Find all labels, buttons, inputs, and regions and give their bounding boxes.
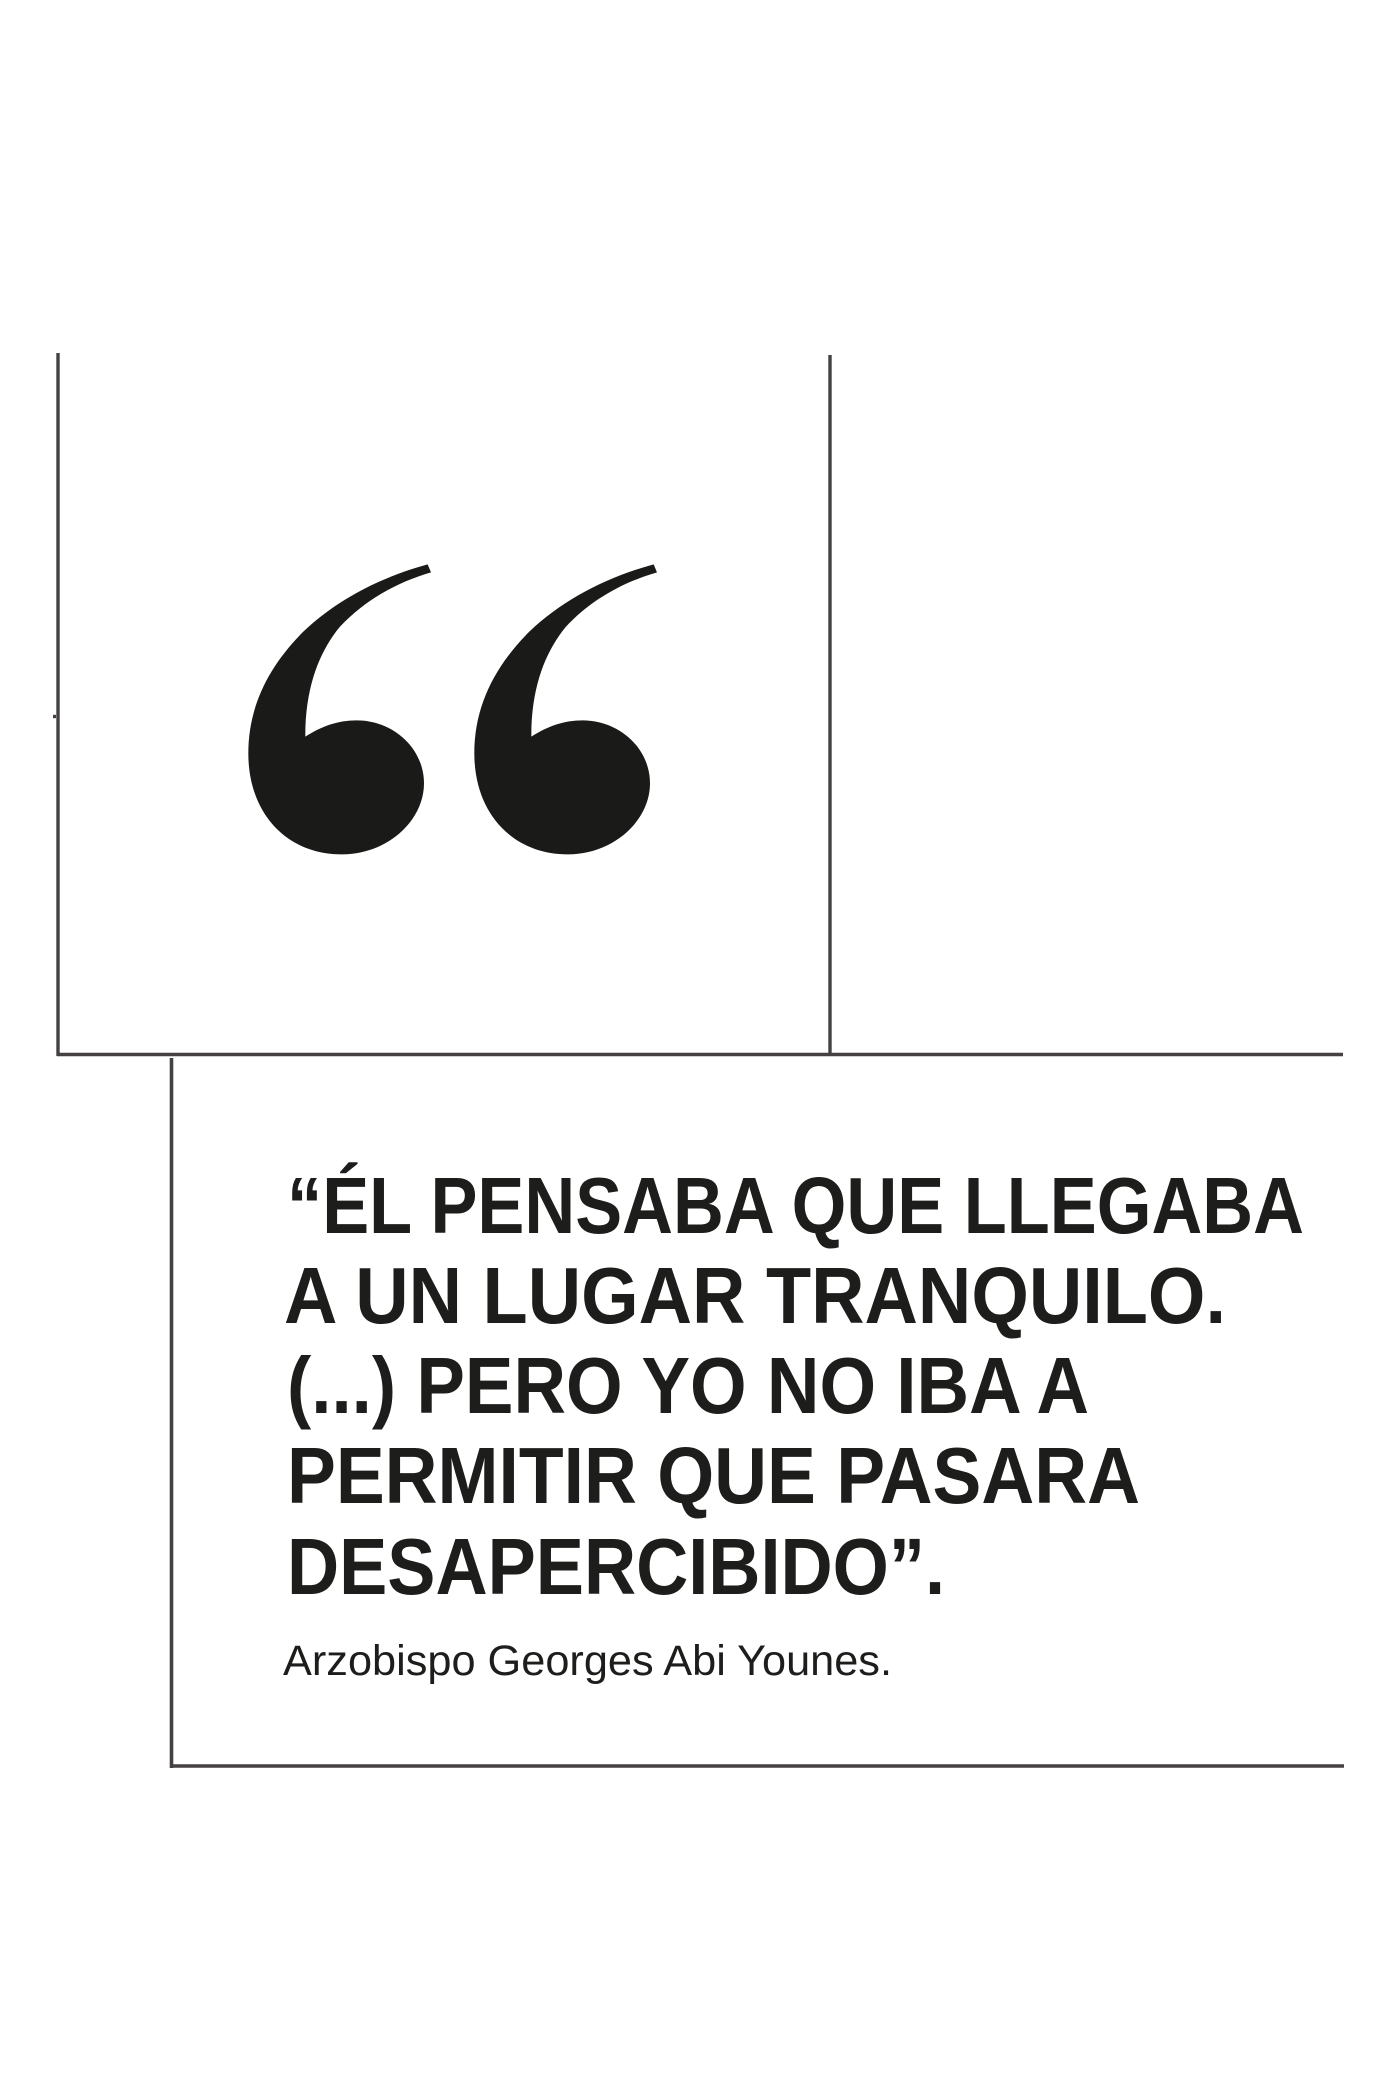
quote text: A UN LUGAR TRANQUILO. [284,1251,1226,1340]
frame lines: lower panel with quote text [170,1058,1344,1768]
quote text: (...) PERO YO NO IBA A [287,1341,1089,1430]
icon: large opening quotation mark [248,564,657,854]
frame lines: upper panel with quotation mark [53,353,1343,1056]
attribution: Arzobispo Georges Abi Younes. [283,1637,892,1685]
quote text: PERMITIR QUE PASARA [287,1431,1140,1520]
quote text: DESAPERCIBIDO”. [287,1522,945,1611]
quote text [284,1161,1304,1611]
